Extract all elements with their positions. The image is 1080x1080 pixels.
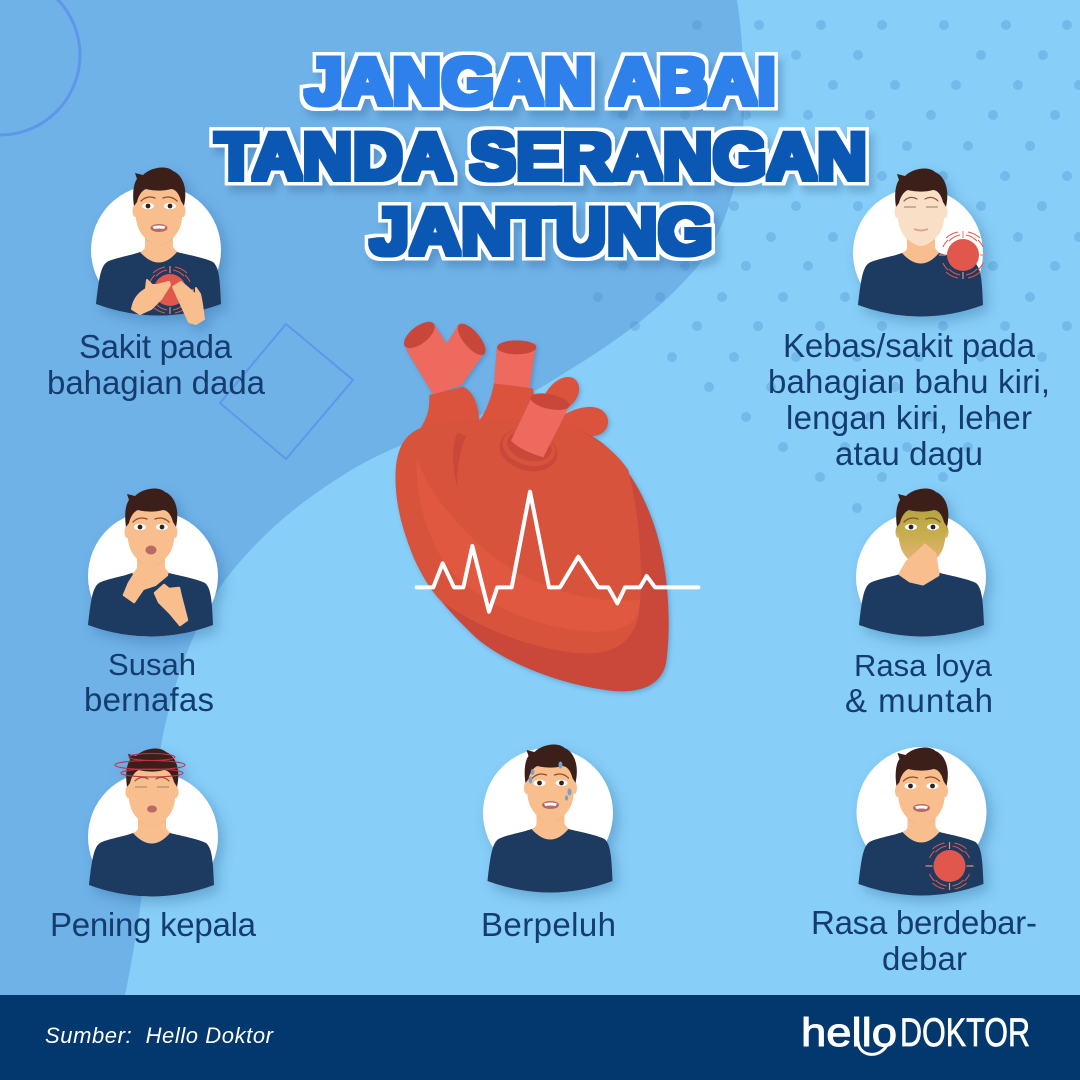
heart mid layer [396, 419, 641, 654]
person: dizziness [88, 749, 218, 902]
person: shortness of breath [88, 489, 218, 641]
heart body [396, 419, 669, 691]
dot pattern [593, 20, 1080, 513]
person: chest pain [91, 168, 221, 324]
heart highlight band [417, 457, 640, 632]
person: nausea [856, 489, 986, 642]
label: breathing [84, 647, 214, 718]
middle vessel [480, 340, 540, 420]
portrait circle [856, 747, 996, 851]
label: palpitations: Rasa berdebar- [811, 904, 1037, 941]
logo: DOKTOR [900, 1011, 1030, 1055]
title: TANDA SERANGAN [215, 119, 867, 193]
hands on chest [132, 280, 204, 324]
label: numbness: Kebas/sakit pada [783, 327, 1036, 364]
label: palpitations [811, 904, 1037, 977]
label: nausea: Rasa loya [854, 648, 993, 683]
logo [801, 1011, 1030, 1055]
heart illustration [396, 317, 698, 691]
title: JANTUNG [370, 194, 713, 268]
hands at throat [124, 567, 187, 625]
source text: Sumber: Hello Doktor [45, 1023, 275, 1048]
label: palpitations: debar [882, 940, 967, 977]
label: dizziness: Pening kepala [50, 906, 257, 943]
sweat drops [529, 762, 572, 801]
background blob [0, 0, 744, 995]
shoulder pain burst [939, 231, 987, 279]
person: palpitations [856, 747, 986, 896]
label: numbness [768, 327, 1050, 472]
aorta ring [495, 422, 562, 478]
portrait circle [853, 188, 983, 318]
label: numbness: bahagian bahu kiri, [768, 363, 1050, 400]
label: breathing: Susah [108, 647, 196, 682]
stethoscope [858, 1042, 887, 1054]
label: numbness: atau dagu [835, 435, 983, 472]
title [215, 44, 867, 268]
portrait circle [88, 511, 218, 641]
portrait circle [91, 189, 230, 281]
label: nausea [845, 648, 993, 719]
label: chest pain: Sakit pada [79, 328, 233, 365]
person: left shoulder pain [853, 169, 987, 318]
label: chest pain line 2: bahagian dada [47, 364, 266, 401]
label: nausea: & muntah [845, 682, 993, 719]
portrait circle [856, 512, 986, 642]
footer bar [0, 995, 1080, 1080]
label: sweating: Berpeluh [481, 906, 616, 943]
ECG line [417, 492, 698, 612]
left vessel [400, 317, 490, 430]
label: numbness: lengan kiri, leher [786, 399, 1032, 436]
dizzy rings [115, 754, 185, 777]
chest pain burst [146, 266, 194, 314]
logo: hello [801, 1011, 897, 1055]
label: breathing: bernafas [84, 681, 214, 718]
title: JANGAN ABAI [305, 44, 776, 118]
person: sweating [483, 745, 613, 892]
decorative ring [0, 0, 80, 135]
portrait circle [483, 748, 622, 849]
hand over mouth [900, 545, 938, 584]
heart fold [453, 433, 466, 487]
heart burst [926, 842, 974, 890]
decorative diamond [220, 324, 353, 459]
front vessel [511, 390, 571, 457]
portrait circle [88, 772, 218, 902]
right vessel stubs [543, 377, 608, 442]
